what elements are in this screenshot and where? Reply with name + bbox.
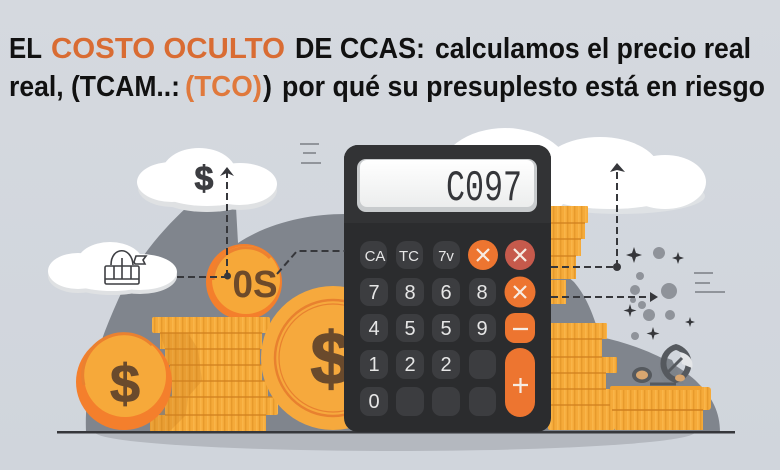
dashed connector: to top-left cloud	[177, 172, 345, 277]
keypad: 5	[440, 318, 452, 340]
title	[9, 33, 765, 103]
dashed connector: right	[551, 172, 650, 297]
large white cloud behind calculator	[437, 128, 706, 228]
big coin: $	[310, 317, 352, 400]
display	[357, 159, 537, 214]
title: COSTO OCULTO	[51, 33, 285, 65]
left dollar coin: $	[110, 354, 140, 414]
keypad: TC	[399, 248, 419, 265]
title: DE CCAS:	[295, 33, 425, 65]
keypad: 6	[440, 282, 452, 304]
dollar glyph: $	[195, 160, 214, 198]
ground line	[57, 431, 735, 434]
keypad: 9	[476, 318, 488, 340]
broken gear debris	[632, 344, 692, 384]
low coin stack, right	[610, 386, 711, 430]
particles and sparkles	[624, 247, 695, 340]
left coin stack	[150, 317, 278, 431]
title: )	[263, 71, 272, 103]
cloud with dollar sign	[137, 148, 277, 212]
keypad: 0	[368, 391, 380, 413]
keypad: 4	[368, 318, 380, 340]
arrowhead and node: left	[220, 167, 234, 280]
motion lines top left	[300, 144, 321, 163]
keypad: 5	[404, 318, 416, 340]
keypad: 8	[476, 282, 488, 304]
keypad: 8	[404, 282, 416, 304]
title: real, (TCAM..:	[9, 71, 180, 103]
keypad: 7	[368, 282, 380, 304]
motion lines right	[694, 273, 725, 292]
icon: dome building	[105, 251, 146, 284]
left dollar coin	[76, 334, 172, 430]
title: (TCO)	[185, 71, 262, 103]
title: calculamos el precio real	[435, 33, 751, 65]
keypad: 1	[368, 354, 380, 376]
keypad: 2	[440, 354, 452, 376]
cloud with building icon	[48, 242, 177, 295]
keypad: 7v	[438, 248, 454, 265]
keypad	[360, 240, 536, 417]
coin: 0S	[206, 244, 282, 320]
title: EL	[9, 33, 42, 65]
keypad: CA	[365, 248, 385, 265]
big coin	[261, 286, 405, 430]
floor shadow	[95, 413, 695, 451]
right coin stacks	[548, 206, 617, 430]
keypad: 2	[404, 354, 416, 376]
gray mounds background	[86, 207, 720, 432]
arrowheads and node: right	[610, 163, 658, 302]
coin: 0S: 0S	[232, 264, 278, 306]
calculator	[344, 145, 551, 432]
display: C097	[446, 164, 522, 214]
